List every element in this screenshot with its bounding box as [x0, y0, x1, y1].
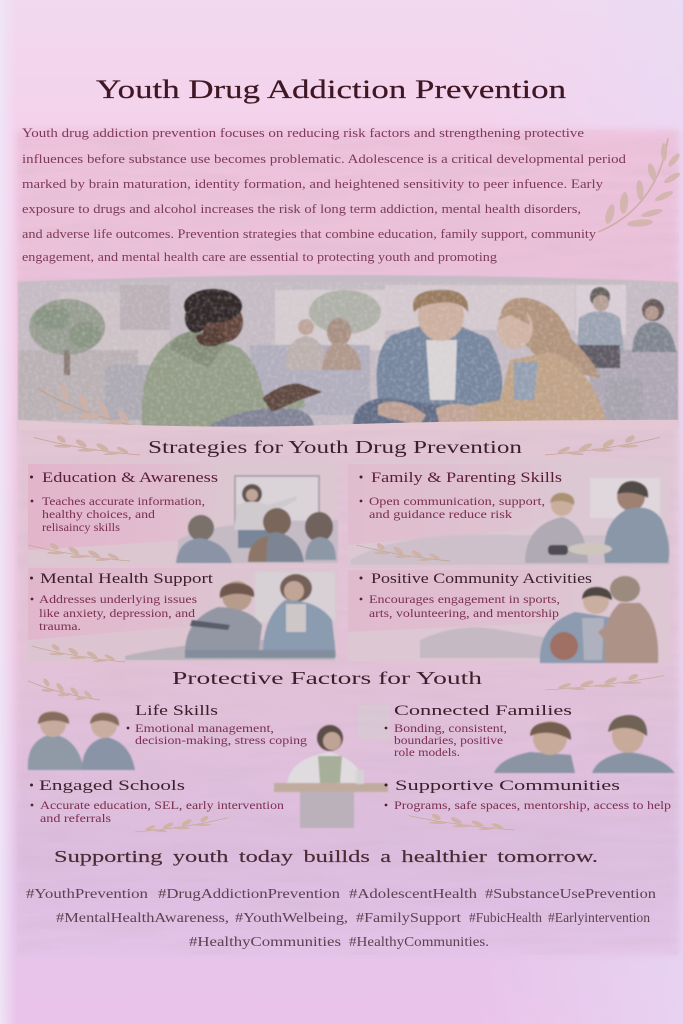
protective: engaged schools: Engaged Schools [39, 778, 185, 794]
hashtags: #MentalHealthAwareness, [56, 910, 229, 925]
body text: and guidance reduce risk [369, 509, 512, 521]
panel: education & awareness [28, 462, 338, 565]
panel: mental health support [28, 568, 338, 663]
section heading: strategies [34, 435, 660, 457]
lower floral accents [135, 814, 515, 833]
body text [31, 496, 205, 534]
protective: engaged schools: Accurate education, SEL, early intervention [40, 800, 284, 812]
protective: connected families: role models. [394, 747, 460, 759]
hashtags: #HealthyCommunities. [349, 934, 489, 949]
hashtags: #HealthyCommunities [189, 934, 341, 949]
protective: life skills: Life Skills [135, 703, 218, 719]
hashtags [26, 886, 656, 949]
panel sprig [356, 543, 450, 562]
section heading: strategies: Strategies for Youth Drug Prevention [148, 437, 522, 457]
bullet heading: Family & Parenting Skills [371, 470, 562, 486]
body text [360, 496, 545, 521]
hero illustration: youth conversation [18, 275, 678, 430]
plant behind centre [309, 290, 381, 334]
body text: Addresses underlying issues [39, 594, 198, 606]
hashtags: #FamilySupport [356, 910, 461, 925]
hero grain [18, 282, 678, 428]
hashtags: #YouthWelbeing, [235, 910, 348, 925]
intro paragraph: exposure to drugs and alcohol increases the risk of long term addiction, mental health disorders, [22, 201, 581, 216]
intro paragraph: influences before substance use becomes problematic. Adolescence is a critical developmental period [22, 151, 627, 166]
room panel [358, 705, 390, 740]
intro paragraph [22, 125, 627, 264]
hashtags: #FubicHealth [469, 910, 542, 925]
base band [18, 420, 678, 430]
body text: Open communication, support, [369, 496, 545, 508]
body text: Teaches accurate information, [42, 496, 205, 508]
sports illustration [420, 576, 658, 663]
textured content wash [17, 130, 679, 955]
body text: relisaincy skills [42, 522, 121, 534]
hashtags: #DrugAddictionPrevention [158, 886, 340, 901]
panel: family & parenting skills [348, 462, 670, 565]
body text: trauma. [39, 621, 81, 633]
protective: connected families: Bonding, consistent, [394, 723, 507, 735]
bullet heading: Education & Awareness [42, 470, 218, 486]
intro paragraph: and adverse life outcomes. Prevention strategies that combine education, family support, community [22, 226, 597, 241]
family illustration [350, 478, 670, 565]
background adults [577, 287, 676, 368]
parent and teen at right [494, 715, 675, 773]
intro paragraph: Youth drug addiction prevention focuses on reducing risk factors and strengthening protective [22, 125, 584, 140]
protective: supportive communities: Supportive Communities [395, 778, 620, 794]
protective: engaged schools: and referrals [40, 813, 112, 825]
section heading: protective factors [28, 668, 664, 701]
bullet heading: Positive Community Activities [371, 571, 592, 587]
intro paragraph: marked by brain maturation, identity formation, and heightened sensitivity to peer infuence. Early [22, 176, 604, 191]
intro paragraph: engagement, and mental health care are essential to protecting youth and promoting [22, 249, 498, 264]
protective: life skills [127, 703, 307, 747]
protective: life skills: Emotional management, [135, 723, 274, 735]
body text [31, 594, 198, 633]
protective: engaged schools [30, 778, 284, 825]
kids at left [28, 711, 135, 770]
body text: Encourages engagement in sports, [369, 594, 560, 606]
protective: connected families: Connected Families [394, 703, 572, 719]
title: Youth Drug Addiction Prevention [96, 75, 566, 104]
hashtags: #Earlyintervention [548, 910, 650, 925]
panel sprig [28, 543, 130, 562]
right teen in tan cardigan [436, 298, 608, 428]
sprig bottom-left of hero [38, 383, 140, 429]
hashtags: #SubstanceUsePrevention [485, 886, 656, 901]
counselling illustration [125, 572, 336, 660]
background couple [285, 318, 362, 370]
centre teen in blue jacket [353, 290, 502, 428]
panel: positive community activities [348, 568, 670, 663]
body text: arts, volunteering, and mentorship [369, 608, 559, 620]
protective: life skills: decision-making, stress coping [135, 735, 307, 747]
body text [360, 594, 560, 620]
protective: connected families: boundaries, positive [394, 735, 503, 747]
body text: healthy choices, and [42, 509, 155, 521]
closing tagline: Supporting youth today buillds a healthier tomorrow. [54, 847, 598, 866]
hero room background [18, 275, 678, 428]
protective: connected families [385, 703, 572, 759]
decorative sprig: upper right [598, 138, 681, 232]
protective: supportive communities: Programs, safe spaces, mentorship, access to help [394, 800, 671, 812]
section heading: protective factors: Protective Factors for Youth [172, 668, 482, 688]
body text: like anxiety, depression, and [39, 608, 195, 620]
classroom illustration [176, 476, 338, 563]
plant [29, 299, 105, 375]
bullet heading: Mental Health Support [40, 571, 214, 587]
panel sprig [31, 644, 125, 663]
left teen in green hoodie [142, 289, 322, 428]
hashtags: #AdolescentHealth [349, 886, 477, 901]
hashtags: #YouthPrevention [26, 886, 148, 901]
protective: supportive communities [384, 778, 671, 812]
protective factor illustrations [28, 705, 675, 828]
counsellor at table [274, 725, 388, 828]
